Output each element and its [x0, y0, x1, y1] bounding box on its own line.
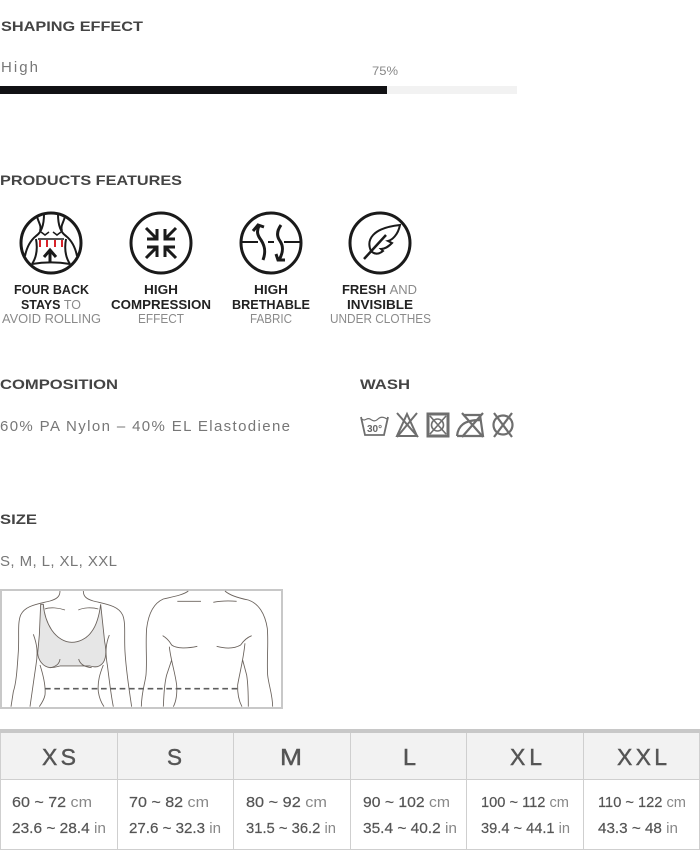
panel: products features [0, 172, 431, 326]
text: high brethable fabric: BRETHABLE [232, 297, 310, 312]
column: XL: 39.4 ~ 44.1 in [481, 820, 570, 837]
column: XXL: XXL [617, 744, 667, 770]
label: high: High [1, 59, 38, 76]
text: four back stays to avoid rolling: STAYS TO [21, 297, 81, 312]
panel: shaping effect [0, 18, 517, 94]
icon: do not bleach [397, 413, 418, 437]
column: M: 31.5 ~ 36.2 in [246, 820, 336, 837]
feature: high breathable [232, 213, 310, 326]
text: high compression effect: HIGH [144, 282, 178, 297]
feature: high compression [111, 213, 211, 326]
column: XL: XL [510, 744, 542, 770]
heading: composition: COMPOSITION [0, 376, 118, 392]
column: M [246, 744, 336, 837]
female figure with bra [11, 591, 132, 707]
text: fresh and invisible under clothes: INVISIBLE [347, 297, 413, 312]
column: XXL [598, 744, 686, 837]
feature: fresh and invisible [330, 213, 431, 326]
icon: wash at 30 degrees [361, 417, 388, 435]
text: high compression effect: COMPRESSION [111, 297, 211, 312]
column: L: 90 ~ 102 cm [363, 794, 450, 811]
panel: composition [0, 376, 290, 435]
column: M: M [280, 744, 302, 770]
waist measurement line [45, 686, 238, 691]
panel: size [0, 511, 282, 708]
column: XS: 60 ~ 72 cm [12, 794, 92, 811]
icon: do not tumble dry [428, 414, 448, 436]
text: four back stays to avoid rolling: AVOID ROLLING [2, 311, 101, 326]
column: XL: 100 ~ 112 cm [481, 794, 569, 811]
column: XS: XS [42, 744, 76, 770]
column: XS: 23.6 ~ 28.4 in [12, 820, 106, 837]
column: L: 35.4 ~ 40.2 in [363, 820, 457, 837]
text: high compression effect [111, 282, 211, 326]
heading: size: SIZE [0, 511, 37, 527]
icon: do not iron [457, 413, 483, 437]
column: XXL: 110 ~ 122 cm [598, 794, 686, 811]
text: high brethable fabric [232, 282, 310, 326]
table top band [0, 729, 700, 733]
panel: wash [360, 376, 512, 437]
column: S: 27.6 ~ 32.3 in [129, 820, 221, 837]
column: M: 80 ~ 92 cm [246, 794, 327, 811]
text: fresh and invisible under clothes: UNDER CLOTHES [330, 311, 431, 326]
table header background [0, 733, 700, 779]
heading: products features: PRODUCTS FEATURES [0, 172, 182, 188]
icon: breathable fabric [241, 213, 301, 273]
column: L [363, 744, 457, 837]
text: fresh and invisible under clothes: FRESH AND [342, 282, 417, 297]
text: fresh and invisible under clothes [330, 282, 431, 326]
text: high brethable fabric: HIGH [254, 282, 288, 297]
column: L: L [403, 744, 416, 770]
table grid [0, 733, 700, 850]
text: four back stays to avoid rolling: FOUR BACK [14, 282, 90, 297]
value: 75%: 75% [372, 64, 398, 78]
text: high brethable fabric: FABRIC [250, 311, 292, 326]
heading: shaping effect: SHAPING EFFECT [1, 18, 144, 34]
icon: back with stays [21, 213, 81, 273]
size table [0, 729, 700, 850]
column: XXL: 43.3 ~ 48 in [598, 820, 678, 837]
column: XS [12, 744, 106, 837]
icon: wash at 30 degrees: 30° [367, 424, 382, 435]
column: S: S [167, 744, 182, 770]
icon: compression arrows [131, 213, 191, 273]
column: XL [481, 744, 570, 837]
feature: four back stays [2, 213, 101, 326]
icon: do not dry clean [494, 413, 512, 437]
male figure [141, 591, 273, 707]
icon: feather [350, 213, 410, 273]
text: four back stays to avoid rolling [2, 282, 101, 326]
column: S [129, 744, 221, 837]
measurement diagram [1, 590, 282, 708]
text: available sizes: S, M, L, XL, XXL [0, 553, 117, 570]
text: fabric composition: 60% PA Nylon – 40% EL Elastodiene [0, 418, 290, 435]
column: S: 70 ~ 82 cm [129, 794, 209, 811]
progress bar: 75% [0, 86, 517, 94]
text: high compression effect: EFFECT [138, 311, 184, 326]
heading: wash: WASH [360, 376, 410, 392]
